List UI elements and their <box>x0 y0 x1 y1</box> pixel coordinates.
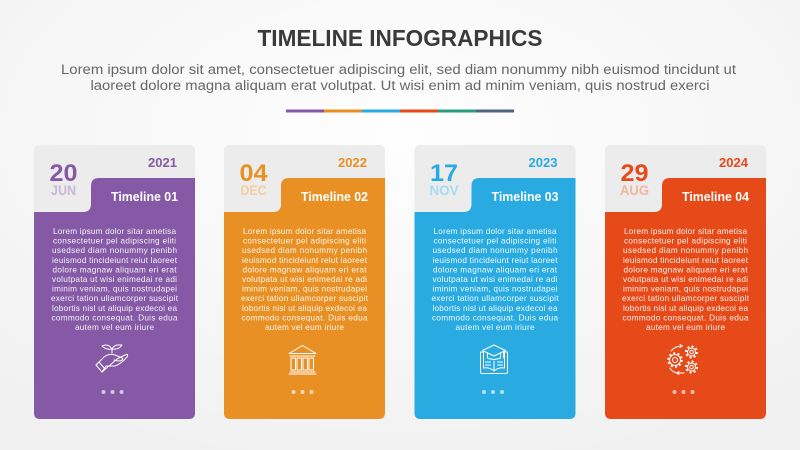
body text: dolore magnaw aliquam eri erat <box>624 265 748 274</box>
date: 04 <box>240 160 268 187</box>
body text: iminim veniam, quis nostrudapei <box>242 285 367 294</box>
date: JUN <box>51 183 76 198</box>
panel: timeline 03 <box>414 145 576 419</box>
card coloured body <box>34 178 195 419</box>
colour divider bar <box>286 110 514 112</box>
date: 17 <box>430 160 458 187</box>
body text: usedsed diam nonummy penibh <box>432 246 558 255</box>
body text: autem vel eum iriure <box>75 323 154 332</box>
body text: consectetuer pel adipiscing eliti <box>243 237 366 246</box>
date: 20 <box>50 160 78 187</box>
body text: autem vel eum iriure <box>646 323 725 332</box>
date <box>240 160 268 198</box>
card header background <box>34 145 195 220</box>
body text: autem vel eum iriure <box>265 323 344 332</box>
card header background <box>605 145 766 220</box>
body text: Lorem ipsum dolor sitar ametisa <box>53 227 176 236</box>
date: 29 <box>620 160 648 187</box>
dots <box>672 390 694 394</box>
body text: commodo consequat. Duis edua <box>432 313 558 322</box>
date <box>50 160 78 198</box>
icon: gears <box>668 344 697 374</box>
body text: lobortis nisl ut aliquip exdecoi ea <box>432 304 558 313</box>
body text <box>622 227 750 332</box>
body text: dolore magnaw aliquam eri erat <box>242 265 367 274</box>
body text: iminim veniam, quis nostrudapei <box>432 285 558 294</box>
heading: Timeline 03 <box>492 189 558 204</box>
body text: commodo consequat. Duis edua <box>622 313 749 322</box>
body text: exerci tation ullamcorper suscipit <box>51 294 179 303</box>
body text: usedsed diam nonummy penibh <box>242 246 367 255</box>
date <box>430 160 458 198</box>
body text: volutpata ut wisi enimedai re adi <box>432 275 558 284</box>
body text: ieuismod tincideiunt reiut laoreet <box>242 256 368 265</box>
body text: volutpata ut wisi enimedai re adi <box>242 275 367 284</box>
panel: timeline 02 <box>224 145 385 419</box>
body text: exerci tation ullamcorper suscipit <box>432 294 559 303</box>
body text: Lorem ipsum dolor sitar ametisa <box>434 227 557 236</box>
card coloured body <box>605 178 766 419</box>
body text: dolore magnaw aliquam eri erat <box>433 265 558 274</box>
subtitle text: laoreet dolore magna aliquam erat volutpat. Ut wisi enim ad minim veniam, quis nostrud exerci <box>90 78 710 93</box>
heading: Timeline 04 <box>682 189 750 204</box>
body text: exerci tation ullamcorper suscipit <box>622 294 750 303</box>
body text: consectetuer pel adipiscing eliti <box>53 237 176 246</box>
body text: iminim veniam, quis nostrudapei <box>52 285 177 294</box>
year: 2021 <box>148 155 177 170</box>
card header background <box>414 145 576 220</box>
body text: consectetuer pel adipiscing eliti <box>434 237 557 246</box>
body text: ieuismod tincideiunt reiut laoreet <box>432 256 558 265</box>
date: AUG <box>620 183 649 198</box>
panel: timeline 04 <box>605 145 766 419</box>
body text: volutpata ut wisi enimedai re adi <box>623 275 748 284</box>
card header background <box>224 145 385 220</box>
heading: Timeline 02 <box>301 189 368 204</box>
body text: Lorem ipsum dolor sitar ametisa <box>624 227 747 236</box>
body text: ieuismod tincideiunt reiut laoreet <box>52 256 178 265</box>
dots <box>102 390 124 394</box>
body text: autem vel eum iriure <box>456 323 535 332</box>
body text: Lorem ipsum dolor sitar ametisa <box>243 227 366 236</box>
subtitle text <box>61 62 736 93</box>
card coloured body <box>414 178 576 419</box>
date: NOV <box>430 183 458 198</box>
dots <box>292 390 314 394</box>
body text <box>432 227 559 332</box>
card coloured body <box>224 178 385 419</box>
body text: commodo consequat. Duis edua <box>52 313 178 322</box>
icon: hand holding plant <box>96 345 128 372</box>
subtitle text: Lorem ipsum dolor sit amet, consectetuer adipiscing elit, sed diam nonummy nibh euismod tincidunt ut <box>61 62 736 77</box>
panel: timeline 01 <box>34 145 195 419</box>
icon: book with graduation cap <box>480 345 508 374</box>
year: 2023 <box>528 155 558 170</box>
date: DEC <box>240 183 267 198</box>
body text: volutpata ut wisi enimedai re adi <box>52 275 177 284</box>
year: 2024 <box>719 155 749 170</box>
heading: Timeline 01 <box>111 189 178 204</box>
body text: lobortis nisl ut aliquip exdecoi ea <box>52 304 177 313</box>
icon: bank building <box>289 346 316 374</box>
body text <box>241 227 369 332</box>
body text: commodo consequat. Duis edua <box>242 313 368 322</box>
body text: lobortis nisl ut aliquip exdecoi ea <box>242 304 367 313</box>
body text: consectetuer pel adipiscing eliti <box>624 237 747 246</box>
body text: ieuismod tincideiunt reiut laoreet <box>623 256 749 265</box>
year: 2022 <box>338 155 367 170</box>
body text: usedsed diam nonummy penibh <box>52 246 177 255</box>
body text <box>51 227 179 332</box>
date <box>620 160 649 198</box>
dots <box>482 390 504 394</box>
body text: exerci tation ullamcorper suscipit <box>241 294 369 303</box>
body text: iminim veniam, quis nostrudapei <box>623 285 748 294</box>
title: TIMELINE INFOGRAPHICS <box>258 25 542 51</box>
body text: usedsed diam nonummy penibh <box>623 246 748 255</box>
body text: dolore magnaw aliquam eri erat <box>52 265 177 274</box>
body text: lobortis nisl ut aliquip exdecoi ea <box>623 304 748 313</box>
